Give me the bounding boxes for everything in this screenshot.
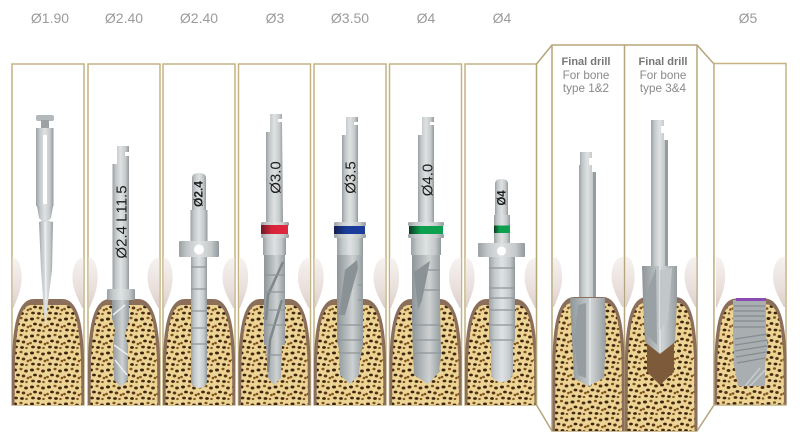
drill: 3.5 with blue ring [334, 117, 366, 384]
drill: 4.0 with green ring [408, 117, 444, 384]
panel: twist drill 2.4 [88, 64, 160, 405]
drill: pilot [36, 115, 54, 327]
engraving: Ø3.0 [268, 161, 284, 194]
caption: bone type 1&2 line one: For bone [563, 69, 609, 82]
caption: bone type 1&2 line two: type 1&2 [563, 82, 609, 95]
drill: final 1&2 [570, 152, 606, 386]
diameter label: 3: Ø3 [266, 10, 285, 26]
engraving: Ø2.4 [192, 181, 206, 207]
diameter label: 4 stop drill: Ø4 [493, 10, 512, 26]
diameter label: 5: Ø5 [739, 10, 758, 26]
panel: twist drill 3.5 [314, 64, 386, 405]
diameter label: 2.40 stop drill: Ø2.40 [180, 10, 218, 26]
drill: stop 4 [478, 179, 525, 382]
panel: pilot drill 1.90 [12, 64, 84, 405]
heading: final drill 1&2: Final drill [562, 56, 610, 68]
engraving: Ø4 [496, 190, 508, 206]
panel: implant 5 [714, 64, 786, 405]
panel: final drill bone type 3&4 [625, 56, 697, 431]
engraving: Ø4.0 [420, 164, 436, 196]
panel: twist drill 4 [390, 64, 462, 405]
diameter label: 3.50: Ø3.50 [331, 10, 369, 26]
drill: final 3&4 [642, 120, 677, 354]
panel: stop drill 4 [465, 64, 537, 405]
diameter label: 2.40: Ø2.40 [105, 10, 143, 26]
caption: bone type 3&4 line one: For bone [640, 69, 686, 82]
panel: stop drill 2.4 [163, 64, 235, 405]
prepared bone socket [647, 335, 674, 385]
implant [733, 298, 768, 386]
drill: 2.4 L11.5 [107, 146, 135, 387]
panel: highlighted final drills frame [536, 45, 714, 431]
panel: final drill bone type 1&2 [552, 56, 624, 431]
caption: bone type 3&4 line two: type 3&4 [640, 82, 687, 95]
diameter label: 4: Ø4 [417, 10, 436, 26]
drill: 3.0 with red ring [261, 114, 289, 385]
panel: twist drill 3 [238, 64, 310, 405]
implant top: purple platform [736, 298, 766, 301]
engraving: Ø2.4 L11.5 [114, 185, 130, 259]
diameter label: 1.90: Ø1.90 [31, 10, 69, 26]
engraving: Ø3.5 [342, 161, 360, 194]
heading: final drill 3&4: Final drill [639, 56, 687, 68]
drill: stop 2.4 [179, 173, 219, 388]
